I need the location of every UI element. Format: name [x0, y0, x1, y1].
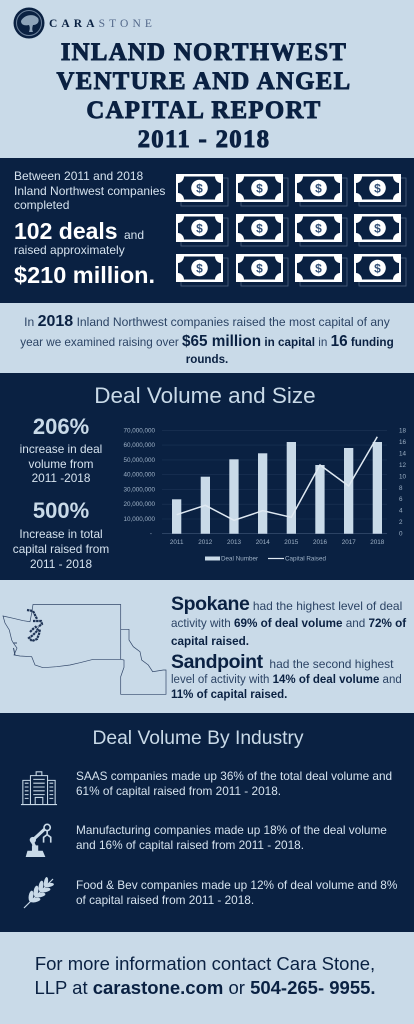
footer: contact: LLP at carastone.com or 504-265- 9955.: [34, 977, 376, 998]
right axis labels: 2: [399, 519, 403, 526]
bars: deal number: [172, 442, 382, 534]
panel: deal volume by industry: [0, 713, 414, 932]
x axis labels: 2017: [342, 539, 356, 546]
x axis labels: 2013: [227, 539, 241, 546]
line: capital raised: [177, 437, 377, 520]
title: CAPITAL REPORT: [86, 97, 322, 124]
callout: 2018 highlight: [20, 313, 394, 366]
icon: wheat: [24, 877, 54, 908]
text: Spokane: activity with 69% of deal volume and 72% of: [171, 617, 406, 630]
left axis labels: 50,000,000: [123, 457, 155, 464]
logo: [14, 8, 156, 38]
stat: 500%: [13, 498, 109, 571]
left axis labels: 40,000,000: [123, 472, 155, 479]
right axis labels: 18: [399, 427, 407, 434]
row: manufacturing: [26, 823, 387, 857]
text: Sandpoint: level of activity with 14% of deal volume and: [171, 674, 402, 686]
text: Spokane: Spokane had the highest level of deal: [171, 593, 402, 615]
summary text: $210 million.: [14, 262, 155, 288]
heading: Deal Volume By Industry: [92, 728, 304, 749]
food and beverage text: of capital raised from 2011 - 2018.: [76, 893, 254, 907]
title: [56, 39, 351, 153]
right axis labels: 8: [399, 485, 403, 492]
stat: 206%: 2011 -2018: [32, 471, 90, 485]
callout: 2018 highlight: year we examined raising over $65 million in capital in 16 funding: [20, 333, 394, 350]
text: Sandpoint: [171, 651, 402, 701]
x axis labels: 2014: [256, 539, 270, 546]
right axis labels: 6: [399, 496, 403, 503]
row: SAAS: [20, 769, 392, 806]
manufacturing text: [76, 823, 387, 852]
right axis labels: [399, 427, 407, 538]
map: Washington and Idaho: [2, 604, 166, 695]
SAAS text: SAAS companies made up 36% of the total deal volume and: [76, 769, 392, 783]
right axis labels: 0: [399, 531, 403, 538]
row: food and beverage: [24, 877, 397, 908]
stat: 500%: Increase in total: [19, 527, 103, 541]
left axis labels: 10,000,000: [123, 516, 155, 523]
stat: 206%: 206%: [33, 414, 89, 439]
SAAS text: 61% of capital raised from 2011 - 2018.: [76, 784, 281, 798]
title: 2011 - 2018: [138, 126, 270, 153]
food and beverage text: [76, 878, 397, 907]
summary text: Inland Northwest companies: [14, 184, 165, 198]
callout: 2018 highlight: In 2018 Inland Northwest companies raised the most capital of any: [24, 313, 390, 330]
stat: 500%: capital raised from: [13, 542, 109, 556]
manufacturing text: Manufacturing companies made up 18% of the deal volume: [76, 823, 387, 837]
heading: Deal Volume and Size: [94, 383, 316, 408]
footer: contact: For more information contact Cara Stone,: [35, 953, 375, 974]
food and beverage text: Food & Bev companies made up 12% of deal volume and 8%: [76, 878, 397, 892]
SAAS text: [76, 769, 392, 798]
left axis labels: 60,000,000: [123, 442, 155, 449]
right axis labels: 4: [399, 508, 403, 515]
stat: 206%: [20, 414, 102, 485]
left axis labels: -: [150, 531, 152, 538]
stat: 206%: increase in deal: [20, 442, 102, 456]
logo wordmark: CARASTONE: [49, 18, 156, 30]
x axis labels: 2015: [284, 539, 299, 546]
right axis labels: 16: [399, 439, 407, 446]
chart legend: [205, 556, 326, 562]
stat: 206%: volume from: [29, 457, 93, 471]
summary text: Between 2011 and 2018: [14, 169, 143, 183]
stat: 500%: 500%: [33, 498, 89, 523]
text: Spokane: capital raised.: [171, 635, 249, 648]
x axis labels: [170, 539, 385, 546]
summary text: raised approximately: [14, 243, 125, 257]
manufacturing text: and 16% of capital raised from 2011 - 2018.: [76, 838, 304, 852]
text: Sandpoint: Sandpoint had the second highest: [171, 651, 394, 673]
right axis labels: 12: [399, 462, 407, 469]
left axis labels: 30,000,000: [123, 486, 155, 493]
panel: deals summary: [0, 158, 414, 303]
icon: robot arm: [26, 824, 52, 857]
summary text: 102 deals and: [14, 218, 144, 244]
chart legend: Deal Number: [221, 556, 258, 562]
summary text: [14, 169, 165, 288]
left axis labels: 20,000,000: [123, 501, 155, 508]
x axis labels: 2018: [370, 539, 385, 546]
summary text: completed: [14, 198, 69, 212]
stat: 500%: 2011 - 2018: [30, 557, 92, 571]
text: Spokane: [171, 593, 406, 648]
icon grid: dollar bills: [176, 174, 406, 286]
icon: office buildings: [20, 771, 58, 806]
right axis labels: 10: [399, 473, 407, 480]
right axis labels: 14: [399, 450, 407, 457]
x axis labels: 2016: [313, 539, 327, 546]
bar and line chart: [123, 427, 407, 562]
text: Sandpoint: 11% of capital raised.: [171, 689, 287, 701]
left axis labels: [123, 427, 155, 538]
panel: deal volume and size: [0, 373, 414, 580]
title: VENTURE AND ANGEL: [57, 68, 351, 95]
callout: 2018 highlight: rounds.: [186, 353, 228, 366]
logo mark: [14, 8, 44, 38]
x axis labels: 2012: [198, 539, 213, 546]
chart legend: Capital Raised: [285, 556, 326, 562]
x axis labels: 2011: [170, 539, 184, 546]
title: INLAND NORTHWEST: [61, 39, 347, 66]
footer: contact: [34, 953, 376, 998]
left axis labels: 70,000,000: [123, 427, 155, 434]
